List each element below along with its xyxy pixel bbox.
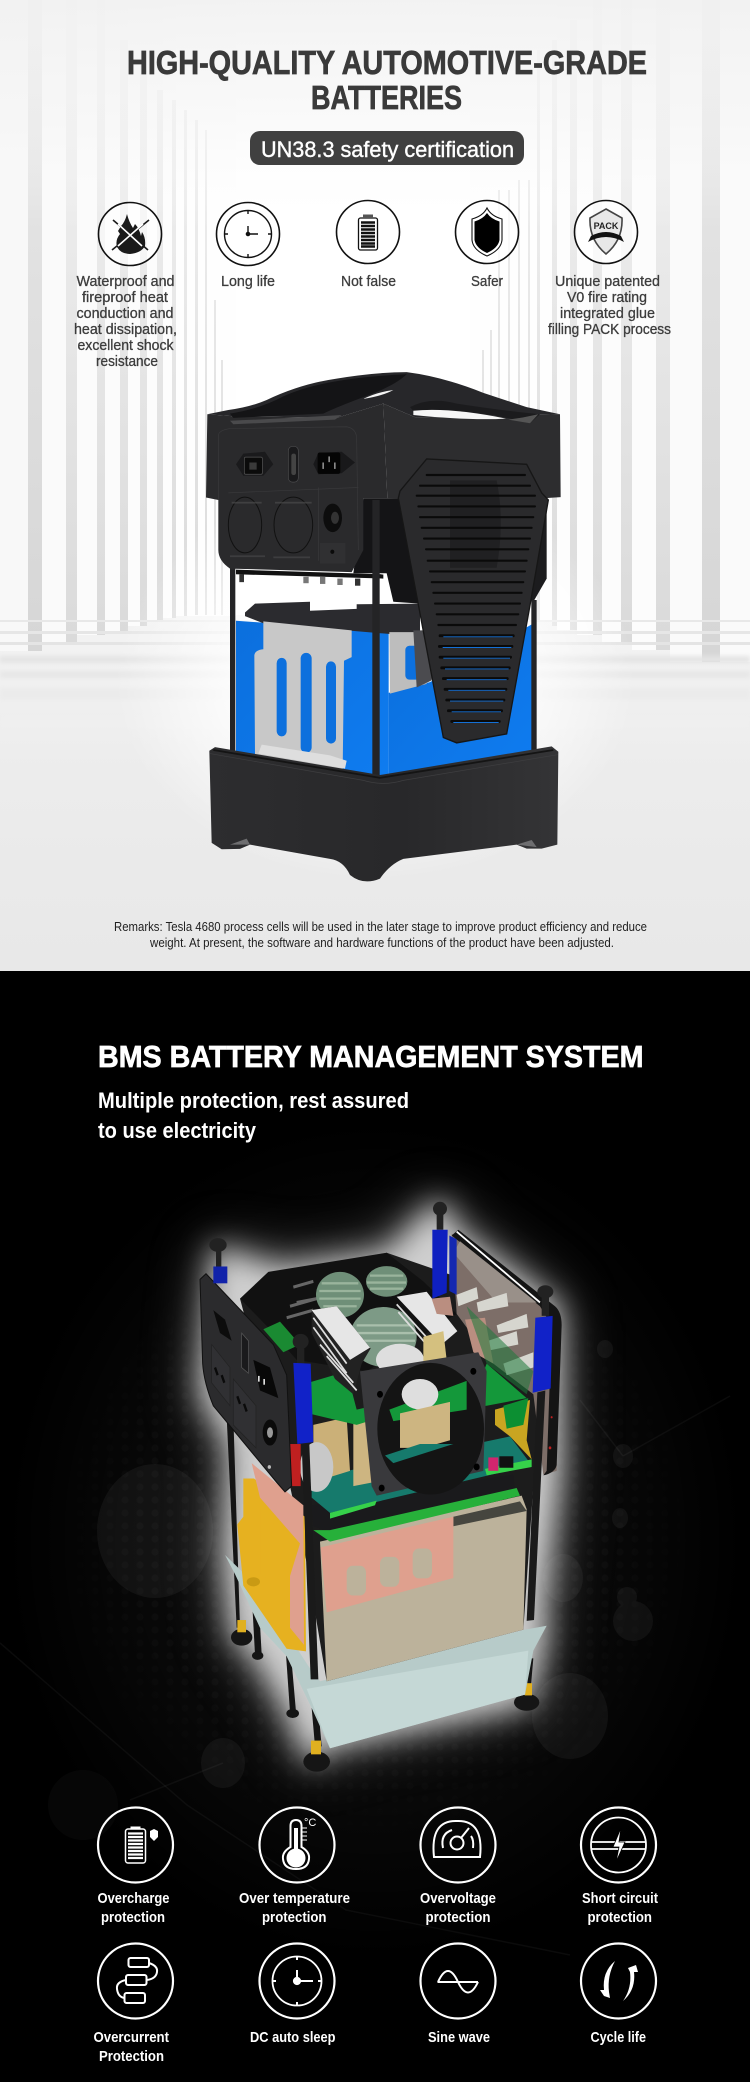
feature: over temperature protection [239,1808,350,1926]
corner rods with blue sleeves [209,1202,553,1679]
feature: cycle life [581,1944,656,2046]
panel: light pillar corridor background [0,0,750,971]
toroid coils [316,1266,424,1376]
title: BATTERIES [311,79,462,116]
label: V0 fire rating [567,290,647,306]
fan [360,1352,487,1496]
label: protection [101,1909,165,1926]
subheading: Multiple protection, rest assured [98,1088,409,1113]
icon: sine wave [420,1944,496,2018]
panel: dark BMS background [0,1232,730,2020]
label: Over temperature [239,1890,350,1907]
top housing [206,372,561,572]
feature: overcharge protection [98,1808,173,1926]
certification badge [250,131,524,165]
label: Protection [99,2048,164,2065]
dark inner backing [240,1253,553,1681]
right power board [432,1230,562,1475]
rear rods and feet [227,1417,539,1772]
title [127,44,647,116]
label [582,1890,658,1926]
feature: DC auto sleep [250,1944,336,2046]
subheading: to use electricity [98,1118,257,1143]
label [548,274,671,338]
icon: thermometer: °C [304,1817,316,1829]
label: protection [262,1909,326,1926]
support rods [230,500,537,777]
label: Not false [341,274,396,290]
label: conduction and [76,306,174,322]
feature: patented PACK process [548,200,671,338]
label: Safer [471,274,503,290]
label: integrated glue [560,306,655,322]
aluminium heat sinks [312,1292,457,1394]
certification badge: UN38.3 safety certification [261,137,514,162]
icon: battery with shield [98,1808,173,1882]
icon: battery [336,200,400,264]
label: Short circuit [582,1890,658,1907]
label: Overcurrent [94,2029,169,2046]
subheading [98,1088,409,1143]
battery cell block [320,1496,527,1681]
label: Long life [221,274,275,290]
label [74,274,177,370]
label: protection [426,1909,490,1926]
illustration: power station with battery pack exposed [206,372,561,881]
remark text: Remarks: Tesla 4680 process cells will be used in the later stage to improve product efficiency and reduce [114,920,647,934]
label: DC auto sleep [250,2029,336,2046]
icon: cycle arrows [581,1944,656,2018]
label: Overvoltage [420,1890,496,1907]
label: Overcharge [98,1890,170,1907]
feature: sine wave [420,1944,496,2046]
yellow side bracket [237,1463,306,1651]
remark text: weight. At present, the software and hardware functions of the product have been adjusted. [149,936,614,950]
icon: linked blocks [98,1944,173,2018]
illustration: internal BMS assembly [200,1202,562,1772]
icon: circuit with lightning bolt [581,1808,656,1882]
feature: waterproof and fireproof [74,202,177,370]
inner frame and circuitry [236,498,547,604]
metal battery bracket [254,621,432,771]
remark text [114,920,647,950]
battery top and circuit board [245,602,420,634]
heading: BMS: BMS BATTERY MANAGEMENT SYSTEM [98,1039,644,1074]
upper green board [308,1364,527,1425]
label [98,1890,170,1926]
label: resistance [96,354,158,370]
glow behind internal assembly [200,1203,560,1765]
label: heat dissipation, [74,322,177,338]
sockets and switch panel [228,446,355,564]
icon: shield [456,200,518,264]
feature: safer [456,200,518,290]
label: Unique patented [555,274,660,290]
title: HIGH-QUALITY AUTOMOTIVE-GRADE [127,44,647,81]
label: fireproof heat [82,290,168,306]
base plate [225,1555,547,1748]
label [94,2029,169,2065]
vented side panel [398,459,548,743]
BMS feature grid [94,1808,658,2065]
blue foam battery wrap [236,621,532,779]
label: filling PACK process [548,322,671,338]
label: Waterproof and [76,274,174,290]
label [239,1890,350,1926]
base housing [209,746,558,881]
feature: long life [216,202,280,290]
left socket panel [200,1274,292,1492]
feature: not false [336,200,400,290]
label: Sine wave [428,2029,490,2046]
icon: PACK badge: PACK [594,221,619,231]
feature: overvoltage protection [420,1808,496,1926]
icon: crossed-out flame [98,202,162,266]
label: Cycle life [590,2029,646,2046]
feature: overcurrent protection [94,1944,173,2065]
top heatsink plate [240,1253,457,1371]
icon: clock [216,202,280,266]
label [420,1890,496,1926]
feature: short circuit protection [581,1808,658,1926]
lower circuit boards [290,1398,532,1542]
label: protection [588,1909,652,1926]
label: excellent shock [78,338,174,354]
icon: gauge [420,1808,496,1882]
icon: clock [260,1944,334,2018]
